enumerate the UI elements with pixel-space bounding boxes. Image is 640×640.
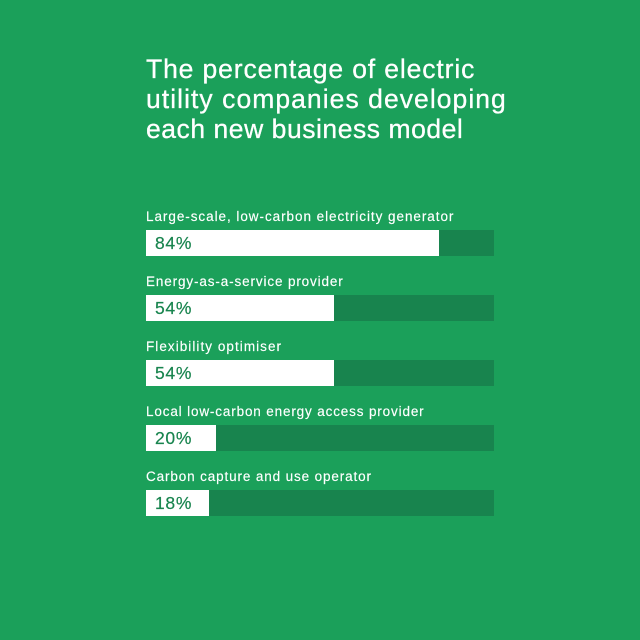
title: each new business model xyxy=(146,114,463,144)
bar: 54% flexibility: 54% xyxy=(155,363,192,383)
bar: 54% flexibility xyxy=(146,360,494,386)
title xyxy=(146,54,507,144)
title: The percentage of electric xyxy=(146,54,475,84)
label: energy-as-a-service: Energy-as-a-service provider xyxy=(146,274,344,289)
bar: 54% energy-as-a-service xyxy=(146,295,494,321)
label: large-scale generator: Large-scale, low-carbon electricity generator xyxy=(146,209,454,224)
title: utility companies developing xyxy=(146,84,507,114)
bar: 20%: 20% xyxy=(155,428,192,448)
bar: 84% xyxy=(146,230,494,256)
bar: 18%: 18% xyxy=(155,493,192,513)
bar: 84%: 84% xyxy=(155,233,192,253)
label: carbon capture: Carbon capture and use operator xyxy=(146,469,372,484)
label: flexibility optimiser: Flexibility optimiser xyxy=(146,339,282,354)
label: local low-carbon: Local low-carbon energy access provider xyxy=(146,404,425,419)
bar: 18% xyxy=(146,490,494,516)
bar: 20% xyxy=(146,425,494,451)
bar: 54% energy-as-a-service: 54% xyxy=(155,298,192,318)
